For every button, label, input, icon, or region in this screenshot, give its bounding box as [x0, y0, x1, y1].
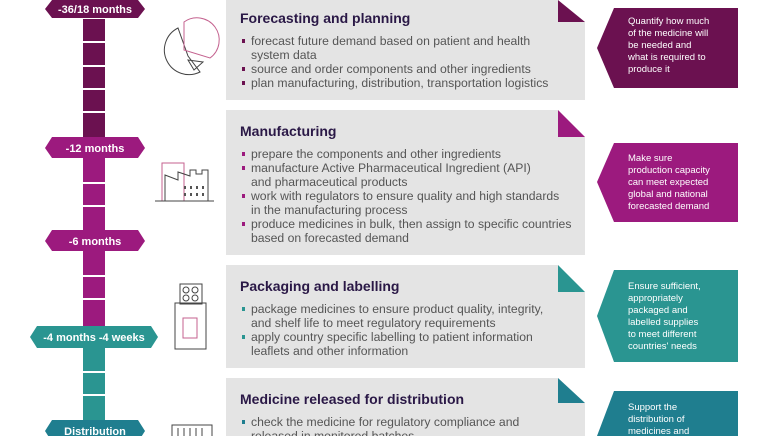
callout: forecasting: what is required to	[627, 52, 706, 63]
callout: packaging: labelled supplies	[628, 317, 698, 328]
callout: packaging: countries' needs	[628, 341, 697, 352]
icon: pie chart	[164, 18, 219, 75]
callout: distribution: distribution of	[628, 414, 685, 425]
panel: manufacturing: prepare the components and other ingredients	[251, 147, 501, 161]
callout: manufacturing	[597, 143, 738, 222]
callout: manufacturing: global and national	[628, 189, 708, 200]
panel: manufacturing: based on forecasted demand	[251, 231, 409, 245]
panel: forecasting: source and order components and other ingredients	[251, 62, 531, 76]
panel: packaging: Packaging and labelling	[240, 278, 399, 294]
callout: forecasting: Quantify how much	[628, 16, 709, 27]
callout: manufacturing: can meet expected	[628, 177, 708, 188]
icon: factory	[155, 163, 214, 201]
panel: forecasting: Forecasting and planning	[240, 10, 410, 26]
panel: manufacturing: work with regulators to ensure quality and high standards	[250, 189, 559, 203]
callout: packaging: appropriately	[628, 293, 683, 304]
panel: forecasting: plan manufacturing, distribution, transportation logistics	[251, 76, 548, 90]
panel: packaging: and shelf life to meet regulatory requirements	[251, 316, 496, 330]
callout: manufacturing: forecasted demand	[628, 201, 709, 212]
panel: manufacturing: manufacture Active Pharmaceutical Ingredient (API)	[251, 161, 531, 175]
panel: manufacturing	[226, 110, 585, 255]
panel: distribution: Medicine released for distribution	[240, 391, 464, 407]
panel: manufacturing: and pharmaceutical products	[251, 175, 408, 189]
callout: packaging	[597, 270, 738, 362]
timeline	[83, 19, 105, 420]
callout: forecasting: of the medicine will	[628, 28, 708, 39]
label: -12 months	[45, 137, 145, 158]
callout: forecasting	[597, 8, 738, 88]
label: -4 months -4 weeks	[30, 326, 158, 348]
icon: container	[172, 425, 212, 436]
panel: distribution	[226, 378, 585, 436]
panel: packaging	[226, 265, 585, 368]
icon: package	[175, 284, 206, 349]
panel: packaging: apply country specific labelling to patient information	[251, 330, 533, 344]
label: -12 months: -12 months	[66, 143, 124, 155]
panel: distribution: check the medicine for regulatory compliance and	[251, 415, 519, 429]
callout: packaging: to meet different	[628, 329, 697, 340]
callout: packaging: Ensure sufficient,	[628, 281, 701, 292]
panel: forecasting: system data	[251, 48, 317, 62]
label: -36/18 months: -36/18 months	[58, 4, 132, 16]
panel: packaging: package medicines to ensure product quality, integrity,	[251, 302, 543, 316]
panel: forecasting	[226, 0, 585, 100]
callout: forecasting: be needed and	[628, 40, 691, 51]
panel: manufacturing: Manufacturing	[240, 123, 336, 139]
panel: packaging: leaflets and other information	[251, 344, 408, 358]
callout: manufacturing: Make sure	[628, 153, 672, 164]
label: -4 months -4 weeks: -4 months -4 weeks	[43, 332, 145, 344]
callout: packaging: packaged and	[628, 305, 688, 316]
panel: manufacturing: produce medicines in bulk, then assign to specific countries	[251, 217, 571, 231]
callout: distribution: Support the	[628, 402, 677, 413]
label: Distribution	[45, 420, 145, 436]
callout: manufacturing: production capacity	[628, 165, 710, 176]
callout: distribution	[597, 391, 738, 436]
label: -36/18 months	[45, 0, 145, 18]
label: -6 months: -6 months	[69, 236, 121, 248]
panel: forecasting: forecast future demand based on patient and health	[251, 34, 530, 48]
callout: forecasting: produce it	[628, 64, 670, 75]
label: -6 months	[45, 230, 145, 251]
panel: manufacturing: in the manufacturing process	[251, 203, 408, 217]
